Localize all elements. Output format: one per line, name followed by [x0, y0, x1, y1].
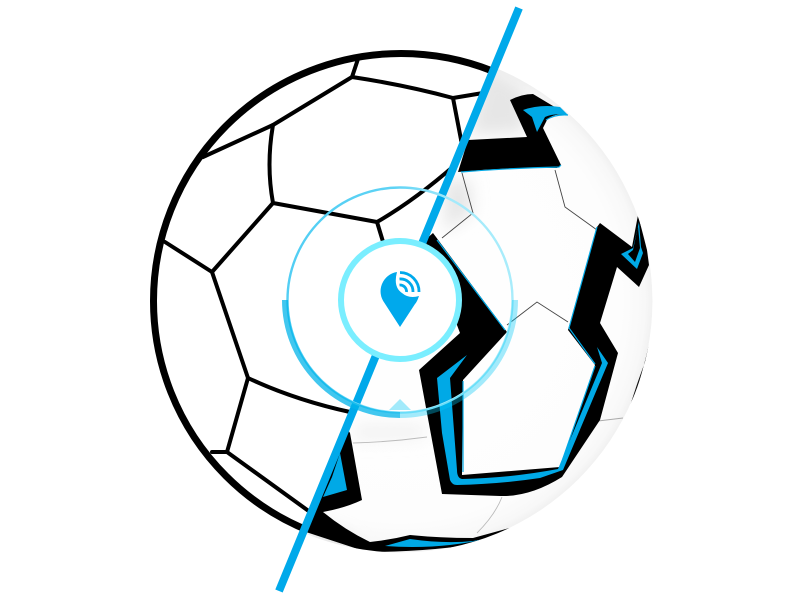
- panel seams: [353, 170, 623, 533]
- right edge graphic: [630, 344, 649, 404]
- black main graphic: [419, 215, 649, 496]
- panel lines: [165, 59, 495, 512]
- outer ring: [285, 188, 515, 415]
- thick lower arc, right: [400, 300, 515, 415]
- pin body: [381, 272, 419, 327]
- shading on the panels: [322, 74, 525, 546]
- ball body: [307, 70, 652, 552]
- icon: location pin with signal: [381, 272, 419, 327]
- blue lower-left accent: [323, 453, 347, 497]
- blue main accent: [437, 347, 608, 485]
- infographic: half line-art, half rendered football: [150, 6, 652, 592]
- badge circle: [341, 241, 459, 359]
- thin ring: [288, 188, 512, 412]
- blue right accent: [621, 222, 643, 269]
- black lower-left graphic: [307, 432, 510, 552]
- bottom notch: [389, 399, 411, 410]
- line-art half of the football: [150, 50, 490, 530]
- outer outline: [150, 50, 490, 530]
- signal waves: [400, 272, 419, 292]
- blue top accent: [523, 106, 568, 132]
- black top graphic: [458, 94, 568, 172]
- thick lower arc, left: [285, 300, 400, 415]
- centre badge: [341, 241, 459, 359]
- blue bottom accent: [385, 539, 480, 547]
- divider line: [279, 8, 519, 591]
- rendered half of the football: [307, 69, 652, 552]
